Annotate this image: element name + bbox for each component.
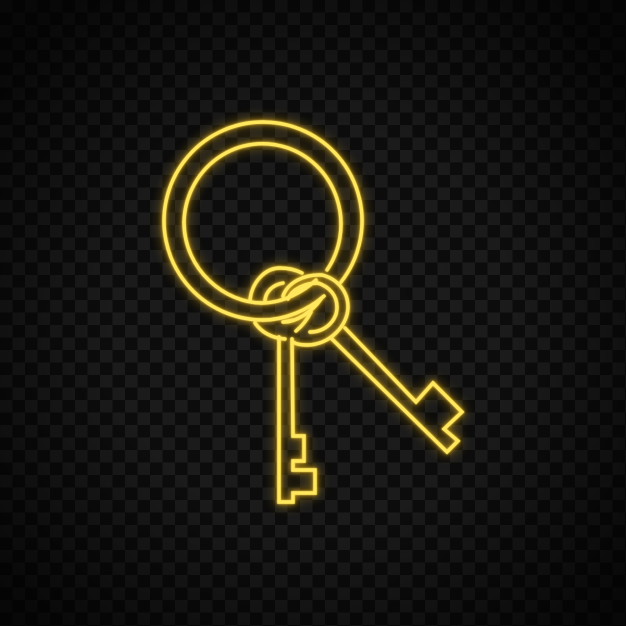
right key [331, 328, 462, 452]
large ring [164, 122, 362, 320]
knot of key bows [250, 268, 348, 345]
icon: key ring with two keys [164, 122, 462, 502]
left key [279, 337, 315, 502]
